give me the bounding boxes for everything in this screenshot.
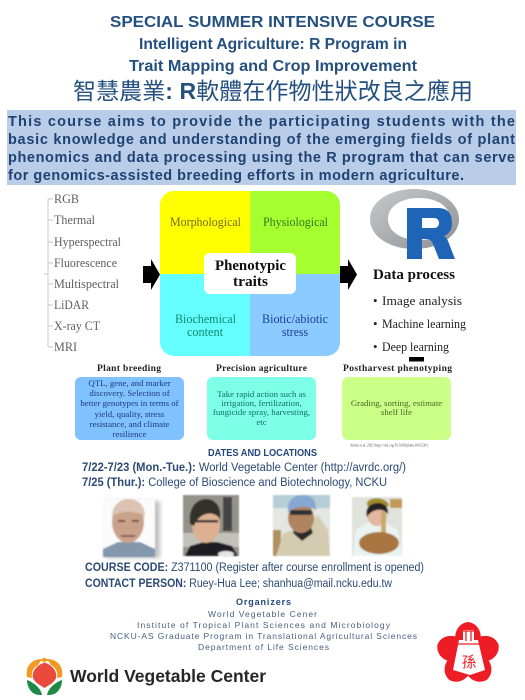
logo: World Vegetable Center xyxy=(27,658,266,695)
bullet list: Image analysis xyxy=(382,293,462,308)
panel: postharvest phenotyping: shelf life xyxy=(381,407,412,417)
title block xyxy=(73,14,473,104)
organizers: NCKU-AS Graduate Program in Translational Agricultural Sciences xyxy=(110,631,417,641)
chart: phenotypic traits quadrants: Physiological xyxy=(263,214,328,229)
panel: postharvest phenotyping xyxy=(342,377,451,440)
sensor list: MRI xyxy=(54,339,77,354)
bullet list: • xyxy=(373,316,378,331)
panel: plant breeding: resilience xyxy=(113,429,146,439)
title: course name line 2: Trait Mapping and Crop Improvement xyxy=(129,58,417,75)
organizers: Institute of Tropical Plant Sciences and Microbiology xyxy=(137,620,391,630)
panel: plant breeding xyxy=(75,377,184,440)
panel: plant breeding: discovery. Selection of xyxy=(89,388,170,398)
heading: dates: DATES AND LOCATIONS xyxy=(208,447,317,459)
citation: Abebe et al. 2021 https://doi.org/10.3390/plants10102301 xyxy=(350,442,428,448)
chart: phenotypic traits quadrants: Phenotypic xyxy=(215,258,286,274)
panel: course description: for genomics-assisted breeding efforts in modern agriculture. xyxy=(8,168,464,184)
sensor list: Fluorescence xyxy=(54,255,117,270)
sensor list: LiDAR xyxy=(54,297,89,312)
title: course type: SPECIAL SUMMER INTENSIVE COURSE xyxy=(110,14,435,31)
panel: precision agriculture: fungicide spray, harvesting, xyxy=(213,407,310,417)
organizers xyxy=(110,597,417,652)
chart: phenotypic traits quadrants: traits xyxy=(233,274,268,290)
title: Chinese: 智慧農業: R軟體在作物性狀改良之應用 xyxy=(73,78,473,104)
date line 1: 7/22-7/23 (Mon.-Tue.): World Vegetable Center (http://avrdc.org/) xyxy=(82,462,406,474)
organizers: World Vegetable Cener xyxy=(208,609,317,619)
sensor list: Multispectral xyxy=(54,276,119,291)
heading: data process: Data process xyxy=(373,267,455,283)
photo: instructor 1 xyxy=(103,499,160,558)
arrow: traits to data process xyxy=(340,259,357,290)
organizers: Department of Life Sciences xyxy=(198,642,329,652)
chart: phenotypic traits quadrants: Morphological xyxy=(170,214,241,229)
application headings xyxy=(97,364,452,374)
panel: postharvest phenotyping: Grading, sorting, estimate xyxy=(351,398,442,408)
application headings: Postharvest phenotyping xyxy=(343,364,452,374)
title: course name line 1: Intelligent Agriculture: R Program in xyxy=(139,36,407,53)
photo: instructor 2 xyxy=(183,495,239,557)
panel: plant breeding: better genotypes in terms of xyxy=(80,398,179,408)
panel: course description xyxy=(7,110,516,185)
heading: organizers: Organizers xyxy=(236,597,291,607)
arrow: sensors to traits xyxy=(143,259,160,290)
sensor list: X-ray CT xyxy=(54,318,100,333)
sensor list: RGB xyxy=(54,191,79,206)
sensor list: Thermal xyxy=(54,212,95,227)
dates and locations xyxy=(82,447,406,489)
panel: precision agriculture: etc xyxy=(256,417,267,427)
wordmark: World Vegetable Center xyxy=(70,666,266,686)
sensor list: Hyperspectral xyxy=(54,234,121,249)
chart: phenotypic traits quadrants: content xyxy=(187,324,223,339)
panel: course description: basic knowledge and understanding of the emerging fields of plant xyxy=(8,132,515,148)
course code: COURSE CODE: Z371100 (Register after course enrollment is opened) xyxy=(85,562,424,574)
date line 2: 7/25 (Thur.): College of Bioscience and Biotechnology, NCKU xyxy=(82,477,387,489)
chart: phenotypic traits quadrants: Biochemical xyxy=(175,311,236,326)
chart: phenotypic traits quadrants: Biotic/abiotic xyxy=(262,311,328,326)
panel: course description: phenomics and data processing using the R program that can serve xyxy=(8,150,515,166)
application headings: Plant breeding xyxy=(97,364,161,374)
chart: phenotypic traits quadrants: stress xyxy=(282,324,308,339)
data process list xyxy=(373,267,466,354)
contact person: CONTACT PERSON: Ruey-Hua Lee; shanhua@mail.ncku.edu.tw xyxy=(85,578,393,590)
logo: NCKU emblem: 孫 xyxy=(461,651,477,672)
photo: instructor 4 xyxy=(352,497,402,556)
panel: precision agriculture xyxy=(207,377,316,440)
panel: course description: This course aims to provide the participating students with the xyxy=(8,114,515,130)
panel: precision agriculture: irrigation, fertilization, xyxy=(221,398,302,408)
sensor list xyxy=(44,191,121,354)
application headings: Precision agriculture xyxy=(216,364,307,374)
chart: phenotypic traits quadrants xyxy=(160,191,340,356)
bullet list: Machine learning xyxy=(382,316,466,331)
photo: instructor 3 xyxy=(273,495,330,556)
bullet list xyxy=(373,293,466,354)
bullet list: • xyxy=(373,339,378,354)
logo: NCKU emblem xyxy=(434,622,502,687)
bullet list: Deep learning xyxy=(382,339,449,354)
panel: plant breeding: QTL, gene, and marker xyxy=(88,378,171,388)
panel: plant breeding: resistance, and climate xyxy=(90,419,170,429)
bullet list: • xyxy=(373,293,378,308)
panel: plant breeding: yield, quality, stress xyxy=(95,409,165,419)
icon: R logo xyxy=(370,189,459,259)
panel: precision agriculture: Take rapid action such as xyxy=(217,389,306,399)
icon: vegetable flower xyxy=(27,658,62,695)
